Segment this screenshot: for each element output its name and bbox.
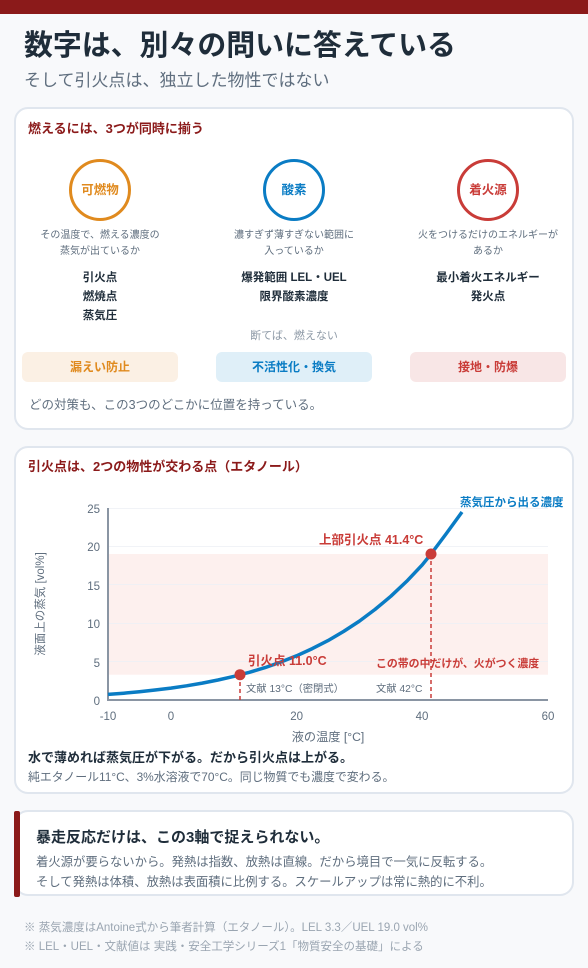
y tick labels: 15 xyxy=(87,581,100,593)
circle: ignition source: 着火源 xyxy=(469,183,507,197)
panel: fire triangle xyxy=(14,107,574,430)
circle: oxygen xyxy=(263,159,325,221)
question: oxygen: 入っているか xyxy=(264,246,324,257)
question: ignition: 火をつけるだけのエネルギーが xyxy=(418,230,558,241)
vapor curve xyxy=(108,512,462,694)
x tick labels: 60 xyxy=(542,711,554,723)
y tick labels: 5 xyxy=(94,658,100,670)
literature value 13: 文献 13°C（密閉式） xyxy=(246,682,344,695)
properties: oxygen: 爆発範囲 LEL・UEL xyxy=(241,272,347,284)
x tick labels: -10 xyxy=(100,711,116,723)
subtitle: そして引火点は、独立した物性ではない xyxy=(24,71,330,90)
question: oxygen xyxy=(234,229,354,257)
caption: cut any: 断てば、燃えない xyxy=(250,330,338,342)
accent bar xyxy=(14,811,20,897)
upper flash point marker xyxy=(426,548,436,560)
lower flash point marker xyxy=(234,669,246,680)
circle: ignition source xyxy=(457,159,519,221)
chart: vapor concentration vs temperature xyxy=(33,495,564,744)
properties: ignition: 発火点 xyxy=(471,290,505,302)
properties: combustible: 燃焼点 xyxy=(83,290,117,302)
x tick labels: 40 xyxy=(416,711,428,723)
measure: inerting and ventilation: 不活性化・換気 xyxy=(252,360,336,374)
panel heading: 燃えるには、3つが同時に揃う xyxy=(28,121,204,136)
measure: leak prevention xyxy=(22,352,178,382)
curve label: 蒸気圧から出る濃度 xyxy=(460,495,564,509)
circle: oxygen: 酸素 xyxy=(281,183,306,197)
callout body: 着火源が要らないから。発熱は指数、放熱は直線。だから境目で一気に反転する。 xyxy=(36,854,492,868)
circle: combustible: 可燃物 xyxy=(81,183,119,197)
title: 数字は、別々の問いに答えている xyxy=(24,30,456,62)
y axis title: 液面上の蒸気 [vol%] xyxy=(33,552,47,656)
footnotes: ※ LEL・UEL・文献値は 実践・安全工学シリーズ1「物質安全の基礎」による xyxy=(24,941,424,953)
callout body: そして発熱は体積、放熱は表面積に比例する。スケールアップは常に熱的に不利。 xyxy=(36,874,492,888)
lower flash point label: 引火点 11.0°C xyxy=(248,653,327,668)
callout body xyxy=(36,854,492,888)
measure: inerting and ventilation xyxy=(216,352,372,382)
x tick labels: 20 xyxy=(290,711,303,723)
y tick labels: 25 xyxy=(87,504,100,516)
y tick labels: 10 xyxy=(87,619,100,631)
footnotes xyxy=(24,921,428,953)
callout heading: 暴走反応だけは、この3軸で捉えられない。 xyxy=(36,829,329,846)
question: ignition: あるか xyxy=(473,246,503,257)
panel heading: 引火点は、2つの物性が交わる点（エタノール） xyxy=(28,459,308,474)
measure: grounding xyxy=(410,352,566,382)
question: combustible xyxy=(40,229,160,257)
y tick labels xyxy=(87,504,100,708)
top bar xyxy=(0,0,588,14)
properties: ignition xyxy=(436,271,540,302)
chart note: 純エタノール11°C、3%水溶液で70°C。同じ物質でも濃度で変わる。 xyxy=(28,770,394,784)
properties: combustible: 引火点 xyxy=(83,272,117,284)
literature value 42: 文献 42°C xyxy=(376,682,423,695)
footnotes: ※ 蒸気濃度はAntoine式から筆者計算（エタノール）。LEL 3.3／UEL 19.0 vol% xyxy=(24,922,428,934)
x axis title: 液の温度 [°C] xyxy=(292,729,364,744)
measure: leak prevention: 漏えい防止 xyxy=(70,360,130,374)
axes xyxy=(108,508,548,700)
properties: combustible: 蒸気圧 xyxy=(83,310,117,322)
properties: oxygen xyxy=(241,271,347,302)
flammable band xyxy=(108,554,548,675)
properties: combustible xyxy=(83,271,117,322)
question: combustible: 蒸気が出ているか xyxy=(60,246,140,257)
properties: ignition: 最小着火エネルギー xyxy=(436,272,540,284)
x tick labels: 0 xyxy=(168,711,174,723)
circle: combustible xyxy=(69,159,131,221)
panel: runaway reaction callout xyxy=(14,810,574,896)
upper flash point label: 上部引火点 41.4°C xyxy=(319,532,423,547)
chart takeaway: 水で薄めれば蒸気圧が下がる。だから引火点は上がる。 xyxy=(28,750,353,765)
measure: grounding: 接地・防爆 xyxy=(458,360,518,374)
question: oxygen: 濃すぎず薄すぎない範囲に xyxy=(234,230,354,241)
x tick labels xyxy=(100,711,554,723)
y tick labels: 20 xyxy=(87,542,100,554)
y tick labels: 0 xyxy=(94,696,100,708)
properties: oxygen: 限界酸素濃度 xyxy=(260,290,328,302)
panel note: どの対策も、この3つのどこかに位置を持っている。 xyxy=(29,398,322,412)
band label: この帯の中だけが、火がつく濃度 xyxy=(376,656,539,670)
question: ignition xyxy=(418,229,558,257)
question: combustible: その温度で、燃える濃度の xyxy=(40,230,160,241)
guide lines xyxy=(240,554,431,700)
